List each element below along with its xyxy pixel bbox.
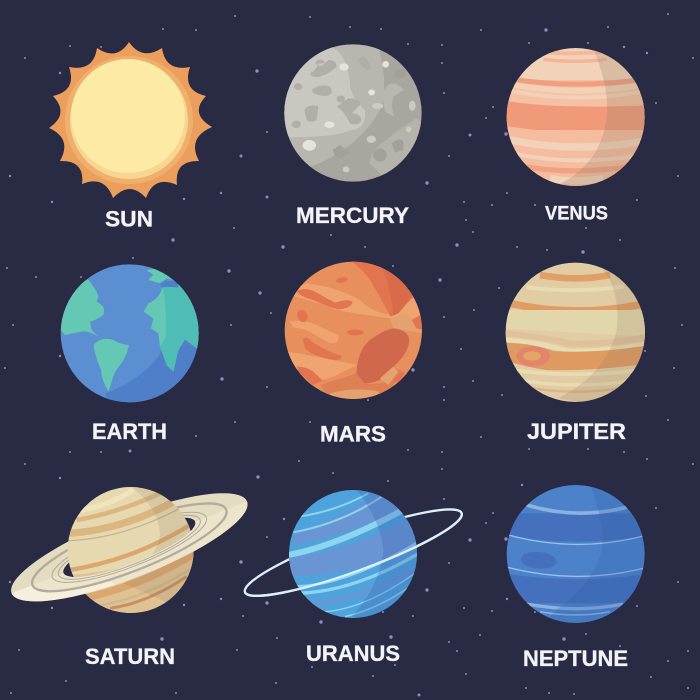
mars bbox=[284, 262, 422, 399]
venus bbox=[506, 48, 645, 186]
label: jupiter: JUPITER bbox=[527, 419, 626, 444]
label: mercury: MERCURY bbox=[296, 203, 409, 228]
ring front bbox=[245, 513, 468, 610]
uranus bbox=[244, 490, 464, 618]
sun bbox=[49, 42, 212, 198]
saturn bbox=[11, 487, 248, 613]
ring front bbox=[12, 501, 258, 622]
mercury bbox=[284, 44, 422, 182]
label: earth: EARTH bbox=[92, 419, 167, 444]
earth bbox=[60, 264, 199, 402]
label: venus: VENUS bbox=[545, 204, 608, 224]
label: saturn: SATURN bbox=[85, 644, 175, 669]
label: sun: SUN bbox=[105, 206, 153, 232]
label: neptune: NEPTUNE bbox=[523, 646, 628, 671]
ring back bbox=[0, 473, 258, 622]
label: uranus: URANUS bbox=[306, 641, 400, 666]
neptune bbox=[506, 485, 645, 623]
ring back bbox=[239, 496, 468, 610]
jupiter bbox=[506, 262, 645, 402]
label: mars: MARS bbox=[320, 422, 386, 446]
